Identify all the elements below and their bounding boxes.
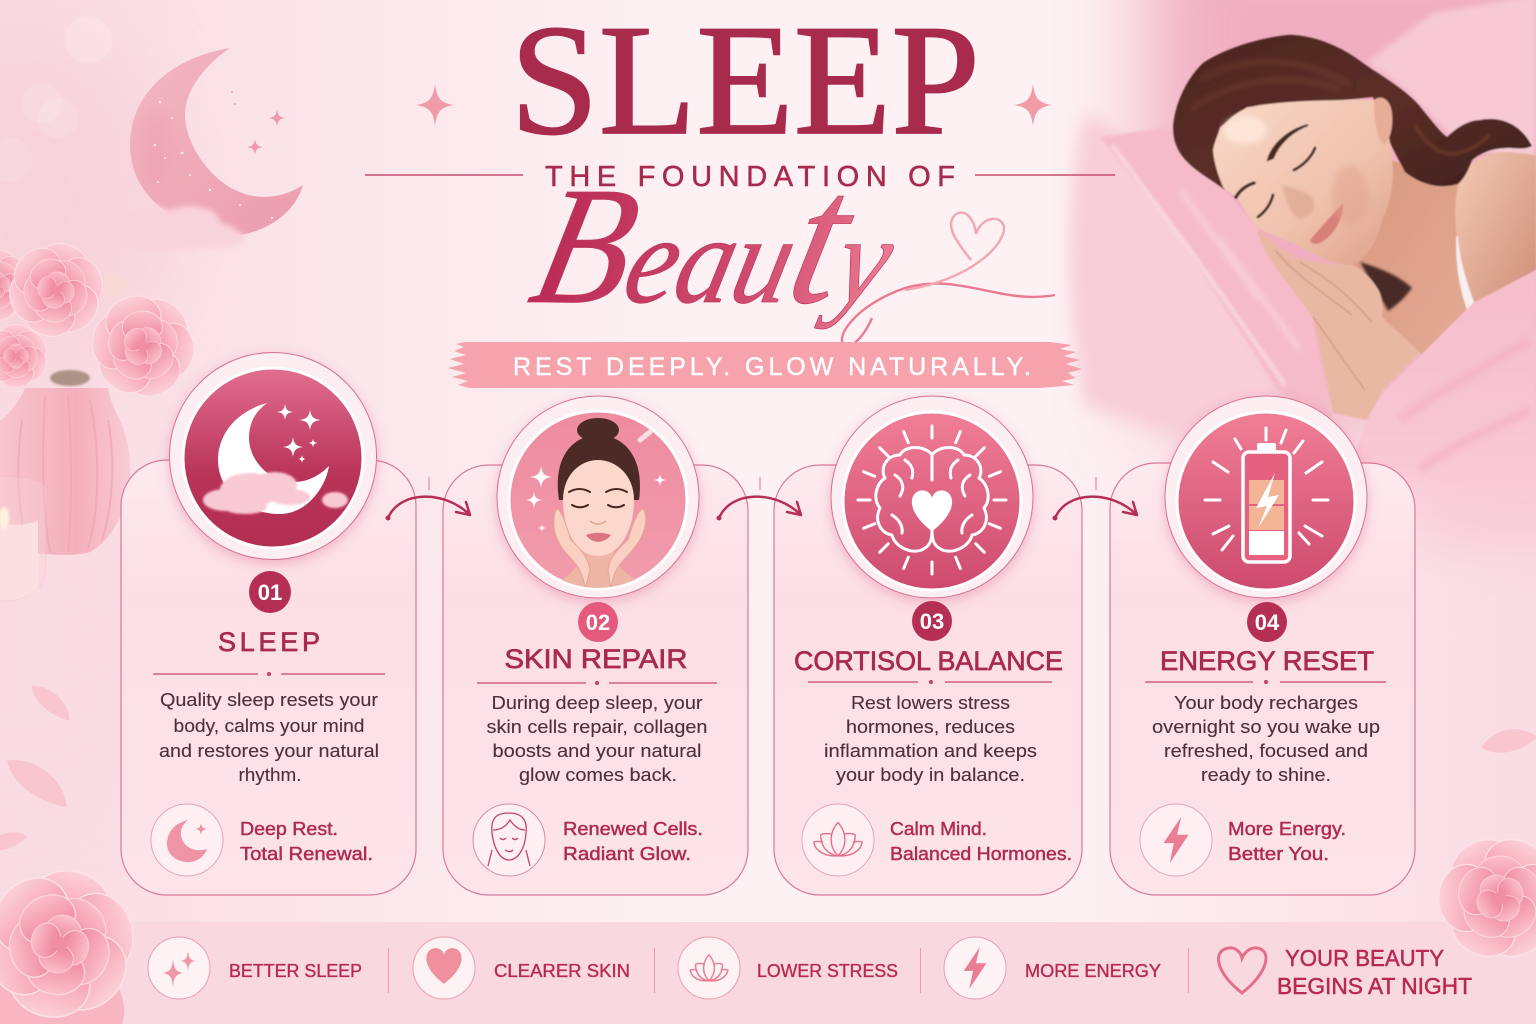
- icon: battery medallion: [1165, 396, 1367, 598]
- heading: CORTISOL BALANCE: [794, 646, 1063, 676]
- step number 01: [249, 571, 291, 613]
- heading: SKIN REPAIR: [504, 644, 688, 674]
- sparkle left: [416, 84, 454, 126]
- icon: brain medallion: [831, 396, 1033, 598]
- description: refreshed, focused and: [1164, 740, 1368, 761]
- clearer skin: [413, 937, 630, 999]
- step number 02: 02: [586, 610, 610, 635]
- benefit icon: lightning: [1140, 804, 1212, 876]
- benefit text: Calm Mind.: [890, 818, 987, 839]
- description: During deep sleep, your: [492, 692, 702, 713]
- eyes and brows: [1236, 125, 1315, 217]
- description: rhythm.: [238, 764, 302, 785]
- step number 01: 01: [258, 580, 282, 605]
- benefit icon: moon: [151, 804, 223, 876]
- description: [824, 692, 1037, 785]
- description: [1152, 692, 1380, 785]
- arrow 1: [386, 477, 470, 520]
- rose bottom left: [0, 851, 161, 1024]
- tagline banner: REST DEEPLY. GLOW NATURALLY.: [513, 353, 1031, 381]
- step number 03: [912, 601, 952, 641]
- arrow 2: [716, 477, 801, 520]
- benefit text: Deep Rest.: [240, 818, 338, 839]
- panel 3: cortisol balance: [774, 396, 1082, 895]
- face: [1213, 100, 1393, 265]
- description: [159, 689, 379, 785]
- closing message: YOUR BEAUTY: [1285, 945, 1444, 971]
- leaves: [50, 370, 90, 386]
- white strap: [1457, 236, 1474, 316]
- rose 1: [0, 231, 120, 349]
- arrow 3: [1052, 477, 1137, 520]
- clearer skin: CLEARER SKIN: [494, 961, 630, 981]
- panel 2: skin repair: [443, 396, 748, 895]
- divider: [808, 680, 1052, 684]
- description: your body in balance.: [836, 764, 1025, 785]
- description: Your body recharges: [1174, 692, 1358, 713]
- lips: [1310, 203, 1343, 244]
- panel 1: sleep: [121, 352, 416, 895]
- description: ready to shine.: [1201, 764, 1331, 785]
- better sleep: [148, 937, 362, 999]
- closing message: [1218, 945, 1472, 999]
- divider: [477, 682, 717, 684]
- panel 4: energy reset: [1110, 396, 1415, 895]
- benefit text: Renewed Cells.: [563, 818, 703, 839]
- hair: [1173, 35, 1532, 190]
- roses and vase left: [0, 231, 220, 601]
- tagline banner: [448, 342, 1082, 388]
- lower stress: LOWER STRESS: [757, 961, 898, 981]
- heading: ENERGY RESET: [1160, 646, 1374, 676]
- description: Quality sleep resets your: [160, 689, 378, 710]
- shadow hair below chin: [1360, 262, 1412, 311]
- rose 2: [66, 270, 220, 422]
- benefit icon: face outline: [473, 804, 545, 876]
- benefit text: [563, 818, 703, 864]
- benefit text: Total Renewal.: [240, 843, 373, 864]
- moon and clouds top left: [102, 48, 303, 251]
- benefit text: [240, 818, 373, 864]
- nose: [1282, 185, 1314, 219]
- ear: [1374, 98, 1392, 145]
- description: skin cells repair, collagen: [486, 716, 708, 737]
- step number 04: [1247, 602, 1287, 642]
- icon: face medallion: [497, 396, 699, 598]
- description: Rest lowers stress: [851, 692, 1010, 713]
- hands: [1257, 230, 1420, 420]
- step number 02: [578, 602, 618, 642]
- description: hormones, reduces: [846, 716, 1015, 737]
- neck and chest: [1345, 160, 1474, 355]
- front pillow: [1100, 127, 1332, 418]
- benefit text: [890, 818, 1072, 864]
- description: and restores your natural: [159, 740, 379, 761]
- rose bottom right: [1409, 810, 1536, 986]
- lower stress: [678, 937, 898, 999]
- rose 3: [0, 324, 52, 388]
- description: glow comes back.: [519, 764, 677, 785]
- subtitle: the foundation of: THE FOUNDATION OF: [545, 161, 955, 193]
- lower pillow: [1070, 115, 1290, 437]
- vase: [0, 388, 130, 555]
- photo: woman sleeping on pink pillows: [1070, 0, 1536, 570]
- candle: [0, 520, 38, 601]
- benefit text: Balanced Hormones.: [890, 843, 1072, 864]
- benefit text: More Energy.: [1228, 818, 1346, 839]
- more energy: MORE ENERGY: [1025, 961, 1161, 981]
- blanket: [1345, 270, 1536, 570]
- description: body, calms your mind: [174, 715, 364, 736]
- better sleep: BETTER SLEEP: [229, 961, 362, 981]
- shoulder: [1455, 152, 1536, 303]
- benefit text: Better You.: [1228, 843, 1329, 864]
- description: [486, 692, 708, 785]
- more energy: [944, 937, 1161, 999]
- benefit text: [1228, 818, 1346, 864]
- divider: [153, 672, 385, 676]
- closing message: BEGINS AT NIGHT: [1277, 973, 1472, 999]
- cheek highlights: [1223, 116, 1267, 144]
- benefit icon: lotus: [802, 804, 874, 876]
- heading: SLEEP: [218, 627, 320, 657]
- divider: [1145, 680, 1386, 684]
- rose left edge: [0, 249, 37, 321]
- script word: Beauty with flourish: Beauty: [517, 135, 920, 343]
- description: inflammation and keeps: [824, 740, 1037, 761]
- bottom benefits strip: [0, 922, 1536, 1024]
- benefit text: Radiant Glow.: [563, 843, 691, 864]
- step number 04: 04: [1255, 610, 1280, 635]
- description: overnight so you wake up: [1152, 716, 1380, 737]
- icon: moon medallion: [170, 352, 376, 560]
- loose petals: [0, 681, 1536, 859]
- sparkle right: [1014, 84, 1052, 126]
- back pillow: [1367, 0, 1536, 170]
- step number 03: 03: [920, 609, 944, 634]
- description: boosts and your natural: [492, 740, 702, 761]
